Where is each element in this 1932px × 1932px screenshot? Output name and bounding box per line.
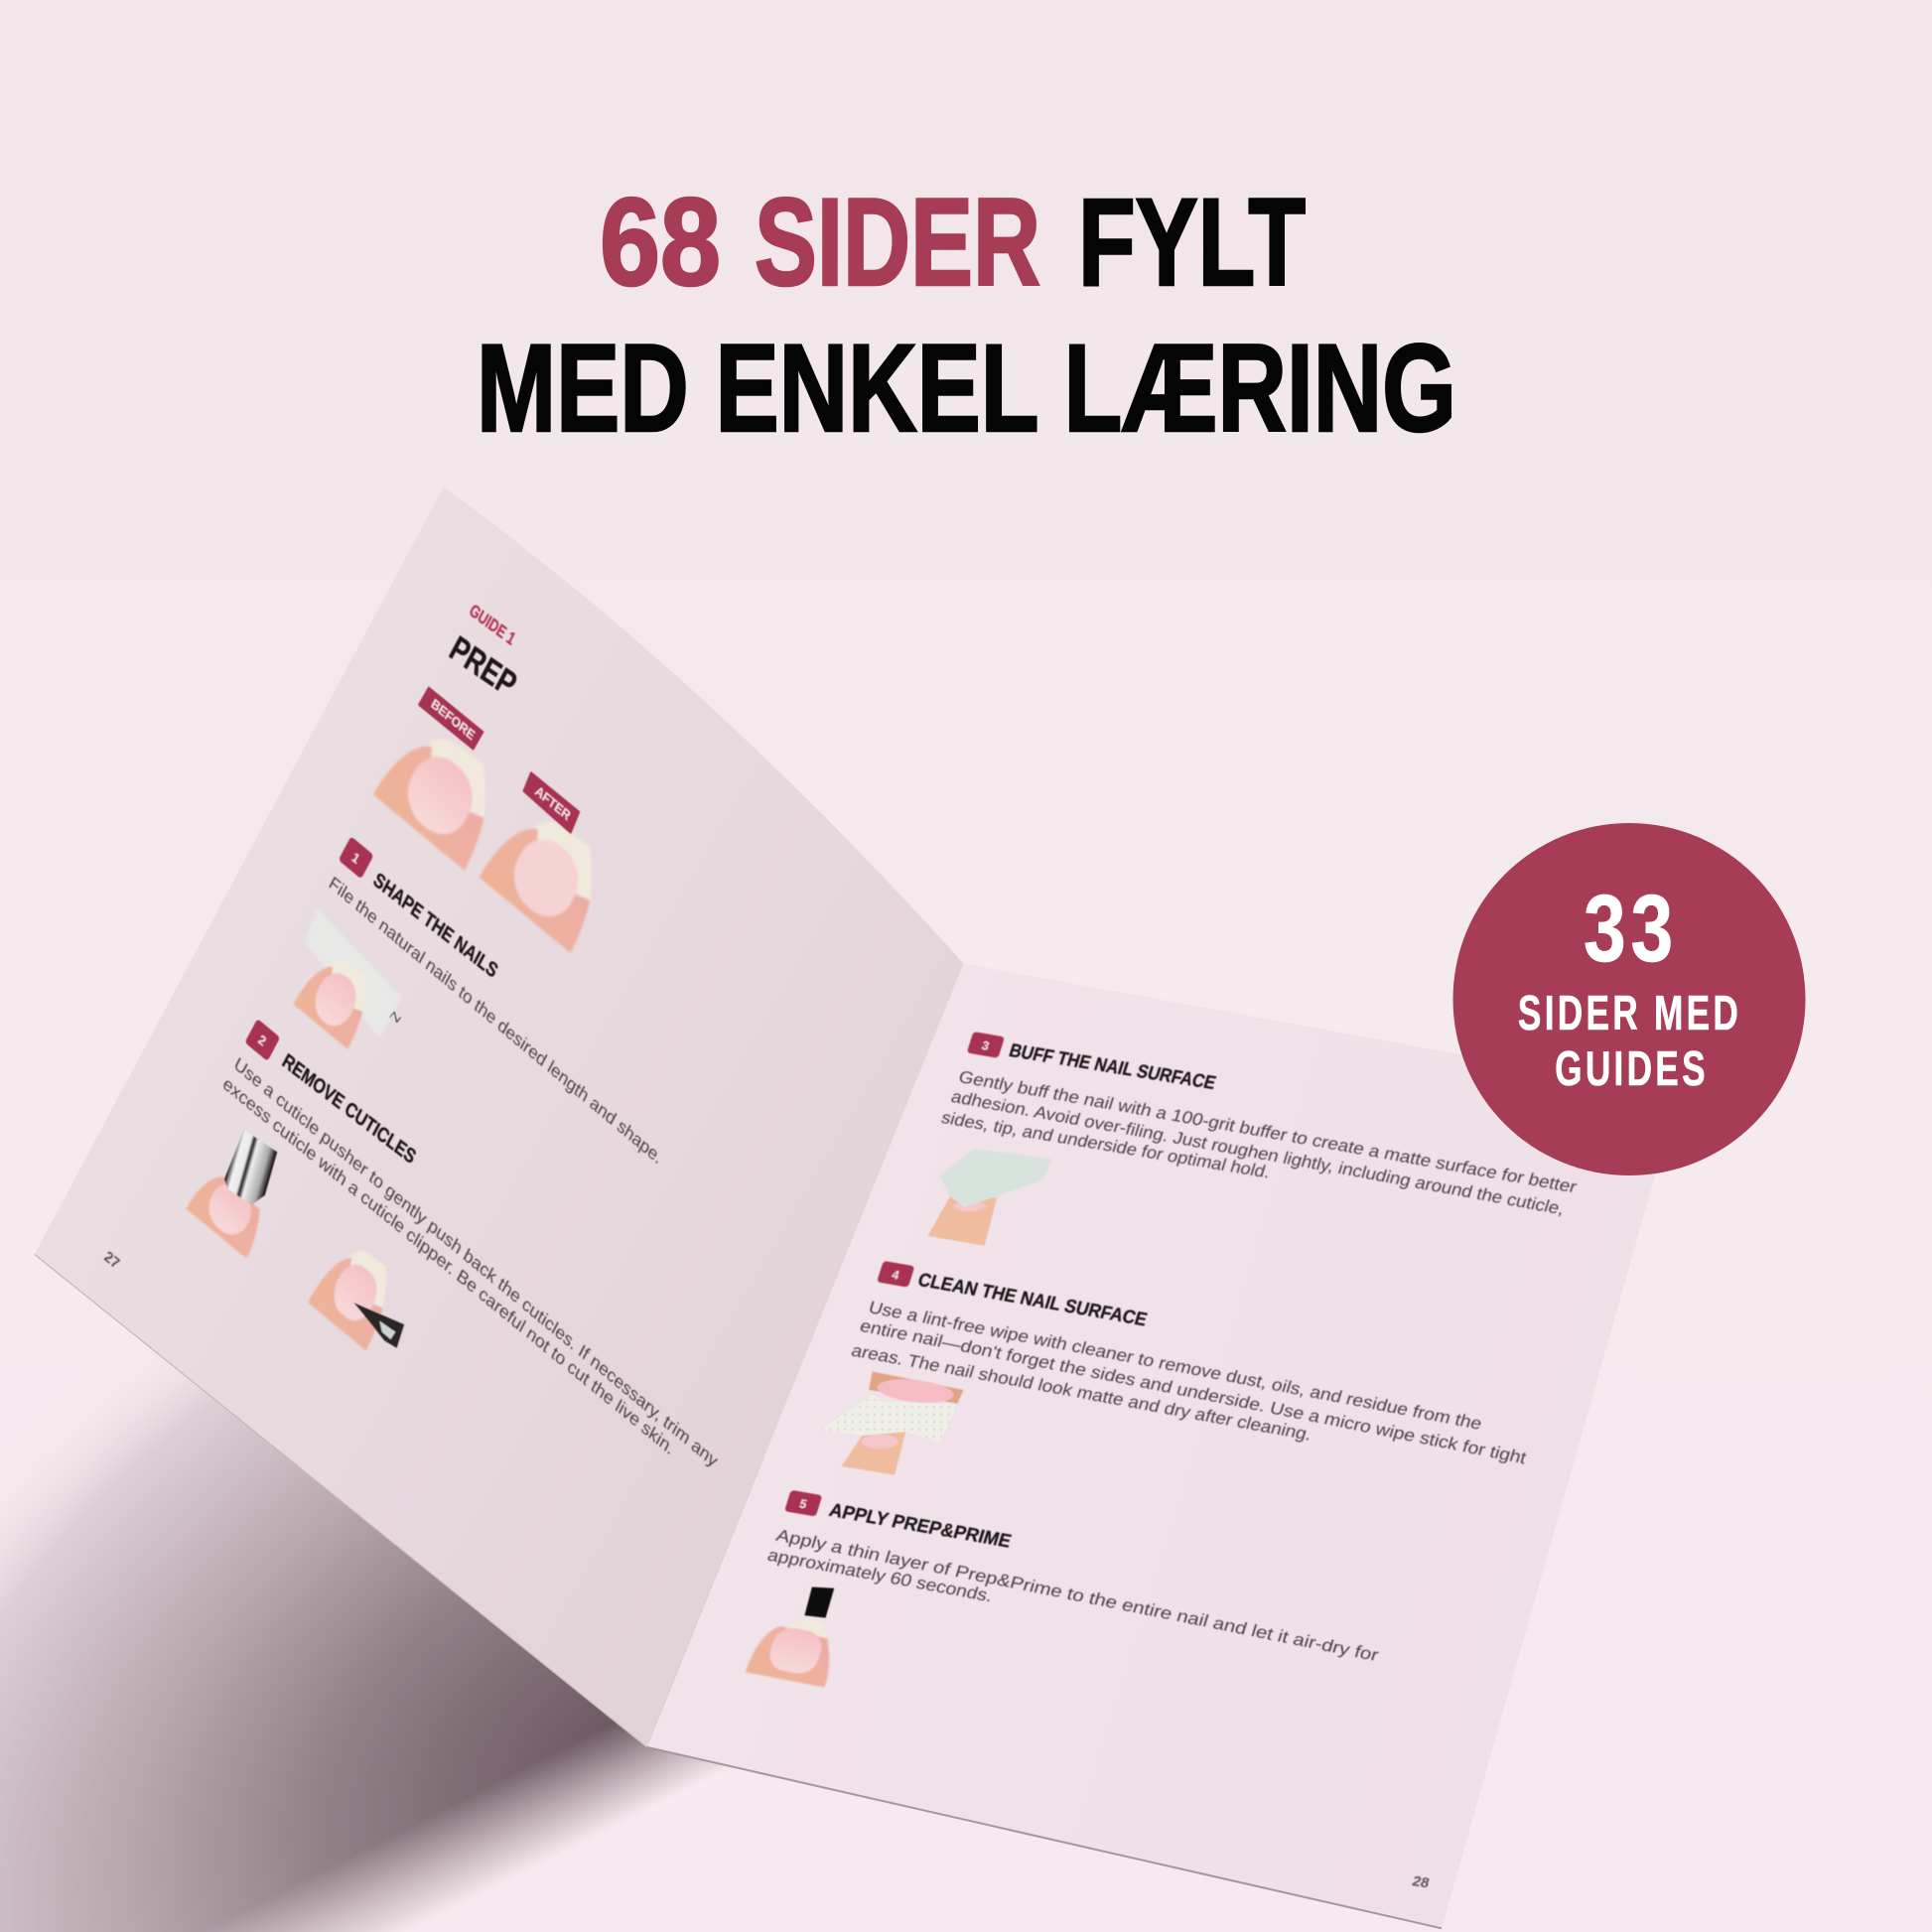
number badge 2: 2 [256,1032,268,1049]
booklet [0,486,1678,1932]
step 4 text: entire nail—don't forget the sides and underside. Use a micro wipe stick for tight [858,1315,1529,1467]
title: SIDER [755,174,1040,312]
number badge 3 [967,1032,1005,1058]
number badge 1 [339,836,374,879]
number badge 1: 1 [349,849,362,867]
step 5 [746,1490,1381,1688]
title: FYLT [1078,174,1306,312]
badge: after: AFTER [533,782,574,824]
icon: finger being filed [293,943,380,1049]
icon: brush on nail [746,1587,844,1688]
step 1 heading: SHAPE THE NAILS [369,869,501,983]
page edge lines [35,1254,1442,1928]
step 1 [293,836,665,1168]
guide label: GUIDE 1 [467,600,519,649]
step 4 text: areas. The nail should look matte and dry after cleaning. [849,1340,1314,1445]
badge: after [523,772,579,833]
page number 27: 27 [101,1249,121,1273]
badge: before: BEFORE [429,696,478,744]
step 3 text: sides, tip, and underside for optimal hold. [939,1107,1273,1181]
number badge 4 [877,1261,914,1288]
number badge 2 [244,1019,280,1061]
icon: wipe on nail [821,1371,964,1475]
step 4 heading: CLEAN THE NAIL SURFACE [915,1270,1150,1330]
icon: nail after [480,792,616,953]
step 3 [928,1032,1580,1246]
step 2 text: excess cuticle with a cuticle clipper. Be careful not to cut the live skin. [220,1073,678,1458]
step 3 text: Gently buff the nail with a 100-grit buffer to create a matte surface for better [956,1066,1580,1196]
step 4 [821,1261,1529,1475]
title: 68 [600,174,721,312]
step 2 [186,1019,722,1471]
page number 28: 28 [1410,1873,1431,1891]
step 3 heading: BUFF THE NAIL SURFACE [1007,1040,1218,1094]
step 5 heading: APPLY PREP&PRIME [827,1500,1014,1553]
title [477,174,1456,458]
step 1 text: File the natural nails to the desired length and shape. [326,872,665,1168]
icon: cuticle clipper on nail [308,1231,404,1351]
icon: nail before [373,710,509,871]
file mark: Z [387,1009,404,1025]
number badge 5 [784,1490,822,1517]
step 5 text: Apply a thin layer of Prep&Prime to the entire nail and let it air-dry for [773,1525,1381,1665]
step 2 heading: REMOVE CUTICLES [279,1049,419,1169]
panel: right page [647,964,1678,1928]
step 5 text: approximately 60 seconds. [765,1545,995,1605]
number badge 3: 3 [980,1038,991,1053]
callout: 33 sider med guides: GUIDES [1555,1041,1709,1096]
step 3 text: adhesion. Avoid over-filing. Just roughen lightly, including around the cuticle, [949,1086,1567,1218]
step 2 text: Use a cuticle pusher to gently push back the cuticles. If necessary, trim any [231,1053,722,1471]
step 4 text: Use a lint-free wipe with cleaner to remove dust, oils, and residue from the [867,1298,1484,1434]
icon: nail file [305,909,402,1038]
panel: left page content [101,600,722,1471]
callout: 33 sider med guides: 33 [1584,876,1678,982]
cast shadow [0,1371,764,1932]
heading: prep: PREP [444,629,522,705]
panel: right page content [746,1032,1580,1891]
title: MED ENKEL LÆRING [477,320,1456,458]
callout: 33 sider med guides [1453,823,1805,1175]
number badge 4: 4 [891,1268,901,1283]
panel: left page [35,486,964,1747]
callout: 33 sider med guides: SIDER MED [1518,986,1741,1040]
badge: before [419,688,483,750]
number badge 5: 5 [797,1497,809,1511]
icon: buffer on nail [928,1150,1051,1246]
icon: cuticle pusher on nail [186,1130,277,1259]
